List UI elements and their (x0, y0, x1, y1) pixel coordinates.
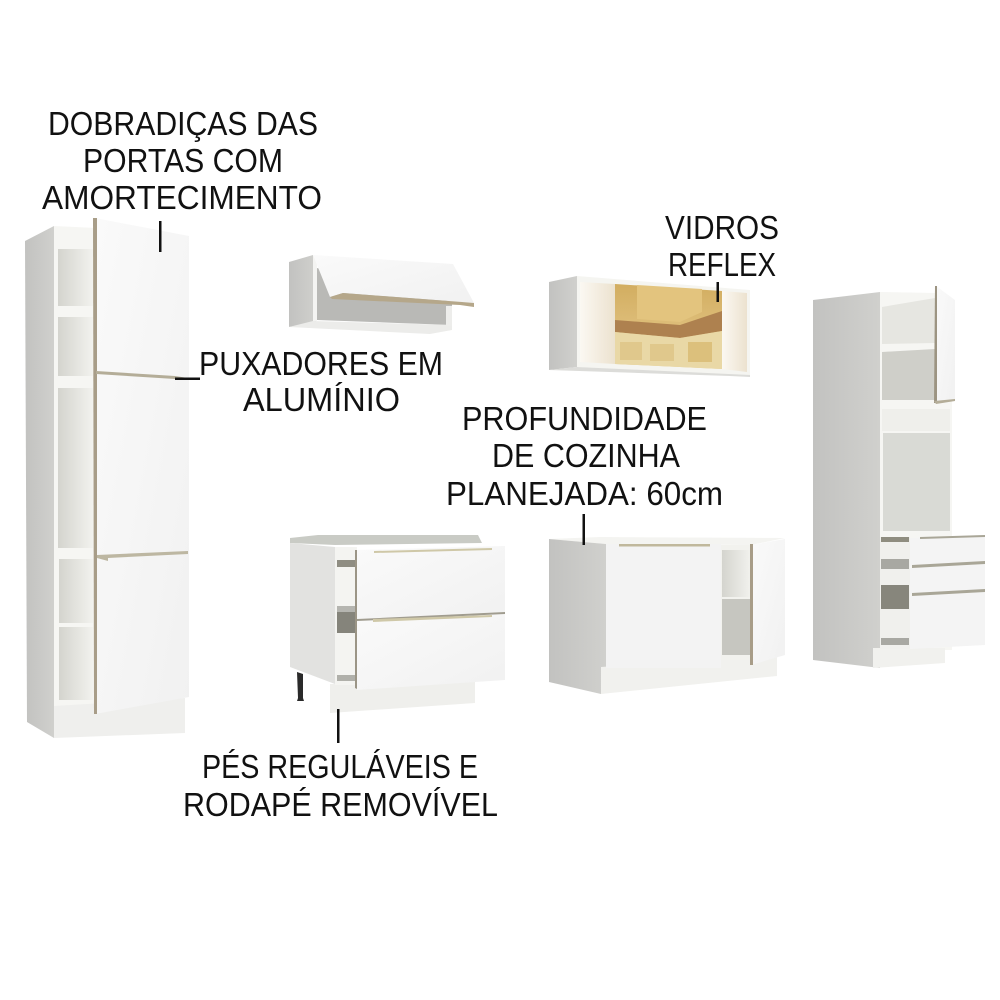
countertop (290, 535, 482, 545)
handles (920, 535, 985, 539)
drawer fronts (910, 535, 985, 566)
glass wall cabinet (549, 276, 750, 377)
open interior (721, 545, 752, 660)
wall cabinet with lift-up door (289, 255, 474, 334)
callout: aluminium handles (175, 345, 443, 418)
drawer edges (355, 550, 357, 689)
upper compartments (882, 298, 950, 431)
callout: hinges (42, 105, 322, 252)
plinth (601, 655, 777, 694)
side (549, 539, 606, 694)
cabinet side (25, 226, 54, 738)
side (813, 292, 880, 668)
callout: depth: PROFUNDIDADE (462, 400, 707, 437)
plinth (330, 682, 475, 713)
callout: aluminium handles: ALUMÍNIO (243, 381, 400, 418)
handles (374, 548, 492, 553)
lift-up door (313, 255, 474, 303)
door base cabinet (549, 537, 785, 694)
callout: reflex glass (665, 209, 779, 302)
callout: depth: PLANEJADA: 60cm (446, 475, 723, 512)
open door (751, 539, 785, 665)
door edge (93, 218, 97, 714)
door edge (330, 293, 474, 307)
drawer base cabinet (290, 535, 505, 713)
callout: adjustable feet (183, 709, 498, 823)
callout: depth: DE COZINHA (492, 437, 680, 474)
callout: depth (446, 400, 723, 545)
oven niche (883, 433, 950, 531)
lower handle (97, 551, 188, 561)
top handle (96, 371, 188, 379)
closed door (606, 544, 721, 668)
open drawer sides (335, 547, 357, 685)
drawer fronts (356, 546, 505, 619)
plinth (873, 648, 945, 668)
callout: hinges: AMORTECIMENTO (42, 179, 322, 216)
open shelves (54, 226, 96, 712)
oven tower cabinet (813, 286, 985, 668)
side (290, 543, 335, 684)
callout: adjustable feet: RODAPÉ REMOVÍVEL (183, 786, 498, 823)
upper door (936, 286, 955, 403)
plinth (54, 698, 185, 738)
callout: adjustable feet: PÉS REGULÁVEIS E (202, 748, 478, 785)
door panels (95, 218, 189, 714)
open drawer sides (880, 537, 910, 649)
tall pantry cabinet (25, 218, 189, 738)
handle (619, 544, 710, 546)
legs (297, 672, 304, 701)
callout: hinges: DOBRADIÇAS DAS (48, 105, 318, 142)
callout: reflex glass: REFLEX (668, 246, 776, 283)
callout: hinges: PORTAS COM (83, 142, 283, 179)
callout: reflex glass: VIDROS (665, 209, 779, 246)
reflective glass (615, 284, 722, 369)
callout: aluminium handles: PUXADORES EM (199, 345, 443, 382)
